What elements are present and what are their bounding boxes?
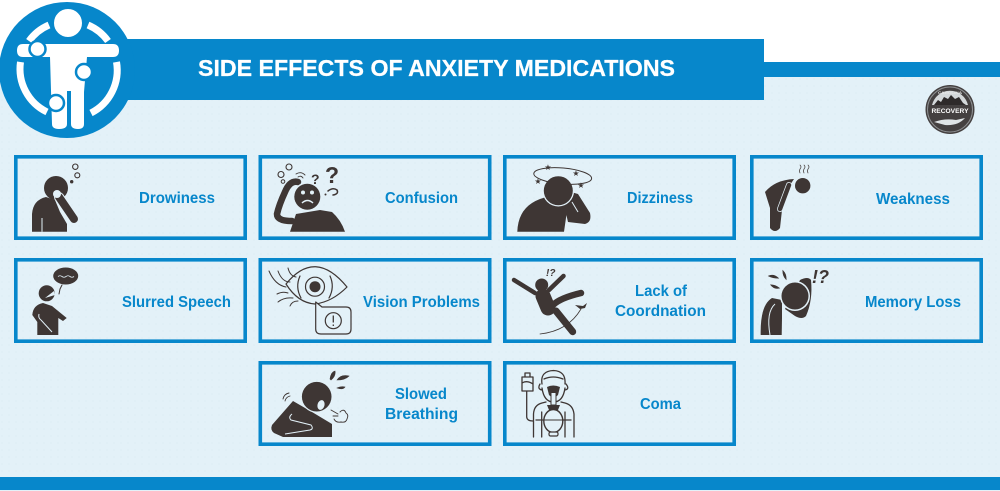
label: Weakness bbox=[876, 191, 950, 208]
icon: confused person: ? bbox=[311, 171, 320, 187]
label: Vision Problems bbox=[363, 294, 480, 311]
label: two lines: Coordnation bbox=[615, 303, 706, 320]
logo: Carolina Recovery bbox=[926, 85, 974, 134]
icon: human body badge bbox=[0, 2, 135, 138]
label: Dizziness bbox=[627, 190, 693, 207]
icon: dizzy person: ★ bbox=[577, 181, 585, 190]
label: two lines: Breathing bbox=[385, 406, 458, 423]
label: Coma bbox=[640, 396, 681, 413]
icon: confused person: ? bbox=[325, 162, 339, 188]
icon: dizzy person: ★ bbox=[534, 177, 542, 186]
icon: person short of breath bbox=[271, 371, 349, 437]
icon: dizzy person bbox=[517, 163, 592, 232]
title bar bbox=[110, 39, 764, 100]
label: two lines: Slowed bbox=[395, 386, 447, 403]
label: Slurred Speech bbox=[122, 294, 231, 311]
icon: drowsy person bbox=[32, 164, 80, 232]
card: Lack of Coordnation bbox=[505, 260, 734, 341]
card: Slowed Breathing bbox=[260, 363, 490, 444]
icon: confused person bbox=[277, 162, 345, 232]
title: SIDE EFFECTS OF ANXIETY MEDICATIONS bbox=[198, 55, 675, 81]
icon: dizzy person: ★ bbox=[544, 163, 552, 172]
card: Coma bbox=[505, 363, 734, 444]
label: Drowiness bbox=[139, 190, 215, 207]
label: two lines bbox=[615, 283, 706, 320]
logo: Carolina Recovery: RECOVERY bbox=[932, 108, 969, 115]
icon: falling person bbox=[514, 268, 587, 334]
icon: person holding head bbox=[761, 267, 829, 335]
label: two lines: Lack of bbox=[635, 283, 688, 300]
icon: person with slurred speech bbox=[32, 268, 78, 335]
logo: Carolina Recovery: CAROLINA bbox=[938, 90, 962, 95]
card: Slurred Speech bbox=[16, 260, 245, 341]
icon: bent-over person bbox=[765, 165, 810, 231]
right header stripe bbox=[760, 62, 1000, 77]
footer band bbox=[0, 477, 1000, 490]
label: two lines bbox=[385, 386, 458, 423]
icon: dizzy person: ★ bbox=[572, 169, 580, 178]
card: Memory Loss bbox=[752, 260, 981, 341]
label: Memory Loss bbox=[865, 294, 961, 311]
icon: patient on IV and mask bbox=[522, 370, 574, 437]
icon: falling person: !? bbox=[546, 268, 555, 279]
label: Confusion bbox=[385, 190, 458, 207]
card: Confusion bbox=[260, 157, 490, 238]
card: Drowiness bbox=[16, 157, 245, 238]
card: Vision Problems bbox=[260, 260, 490, 341]
icon: eye with alert bbox=[269, 267, 351, 334]
card: Weakness bbox=[752, 157, 981, 238]
icon: person holding head: !? bbox=[812, 267, 829, 287]
card: Dizziness bbox=[505, 157, 734, 238]
